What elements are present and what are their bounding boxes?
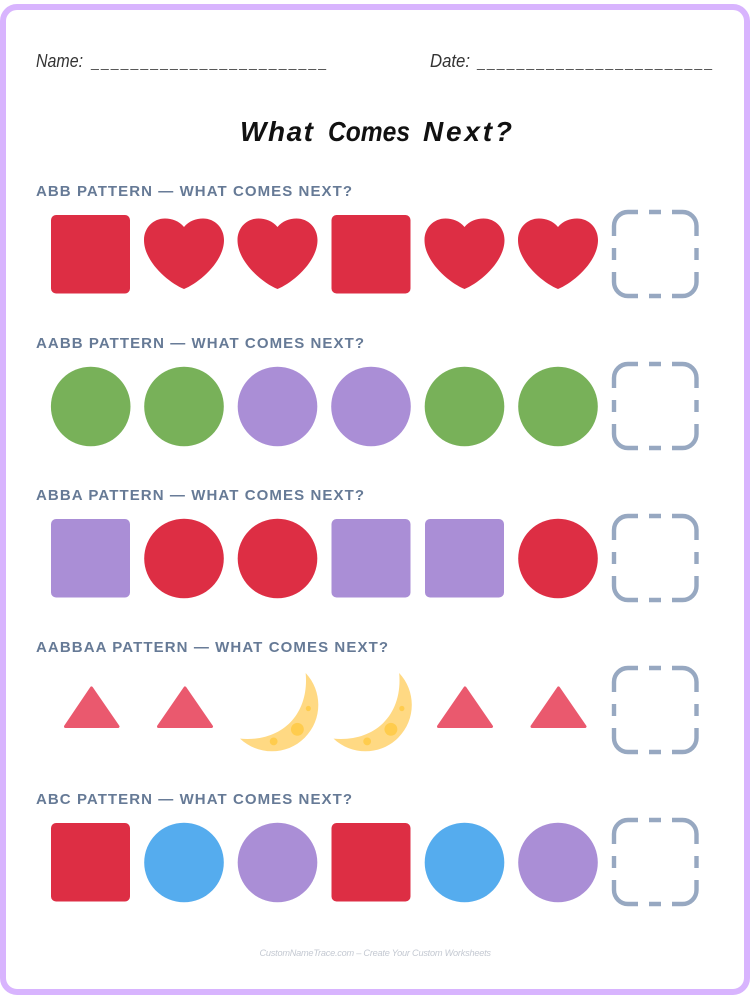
heading: ABC pattern: ABC PATTERN — WHAT COMES NEXT? <box>36 791 352 808</box>
shape: red square <box>51 823 130 902</box>
shape: triangle <box>438 688 492 726</box>
heading: AABB pattern: AABB PATTERN — WHAT COMES NEXT? <box>36 335 364 352</box>
shape: purple circle <box>518 823 598 902</box>
heading: ABBA pattern: ABBA PATTERN — WHAT COMES NEXT? <box>36 487 364 504</box>
shape: purple circle <box>331 367 411 446</box>
answer box: empty dashed <box>614 212 696 296</box>
title: What <box>240 116 315 147</box>
panel: AABB pattern <box>36 335 696 448</box>
shape: green circle <box>51 367 131 446</box>
title: Comes <box>328 116 410 147</box>
shape: blue circle <box>144 823 224 902</box>
title <box>240 116 512 147</box>
shape: green circle <box>144 367 224 446</box>
shape: purple square <box>51 519 130 598</box>
shape: blue circle <box>425 823 504 902</box>
shape: heart <box>144 218 224 289</box>
panel: AABBAA pattern <box>36 639 696 752</box>
shape: square <box>51 215 130 294</box>
heading: AABBAA pattern: AABBAA PATTERN — WHAT COMES NEXT? <box>36 639 388 656</box>
date field: ________________________ <box>476 54 712 70</box>
shape: heart <box>518 218 598 289</box>
panel: ABB pattern <box>36 183 696 296</box>
name field <box>36 51 326 71</box>
footer: CustomNameTrace.com – Create Your Custom Worksheets <box>260 948 491 958</box>
shape: square <box>332 215 410 294</box>
shape: red circle <box>144 519 224 598</box>
shape: red circle <box>518 519 598 598</box>
shape: red circle <box>238 519 317 598</box>
shape: moon <box>334 673 412 751</box>
shape: green circle <box>518 367 598 446</box>
shape: heart <box>238 218 318 289</box>
shape: triangle <box>66 688 118 726</box>
shape: purple circle <box>238 823 317 902</box>
date field <box>430 51 712 71</box>
shape: triangle <box>532 688 585 726</box>
heading: ABB pattern: ABB PATTERN — WHAT COMES NEXT? <box>36 183 352 200</box>
answer box: empty dashed <box>614 516 696 600</box>
shape: green circle <box>425 367 504 446</box>
panel: ABBA pattern <box>36 487 696 600</box>
panel: ABC pattern <box>36 791 696 904</box>
shape: triangle <box>158 688 212 726</box>
shape: purple circle <box>238 367 317 446</box>
title: Next? <box>423 116 512 147</box>
date field: Date: <box>430 51 470 71</box>
answer box: empty dashed <box>614 820 696 904</box>
answer box: empty dashed <box>614 364 696 448</box>
name field: ________________________ <box>90 54 326 70</box>
shape: purple square <box>332 519 410 598</box>
shape: red square <box>332 823 410 902</box>
name field: Name: <box>36 51 83 71</box>
shape: purple square <box>425 519 504 598</box>
shape: moon <box>240 673 318 751</box>
answer box: empty dashed <box>614 668 696 752</box>
shape: heart <box>424 218 504 289</box>
